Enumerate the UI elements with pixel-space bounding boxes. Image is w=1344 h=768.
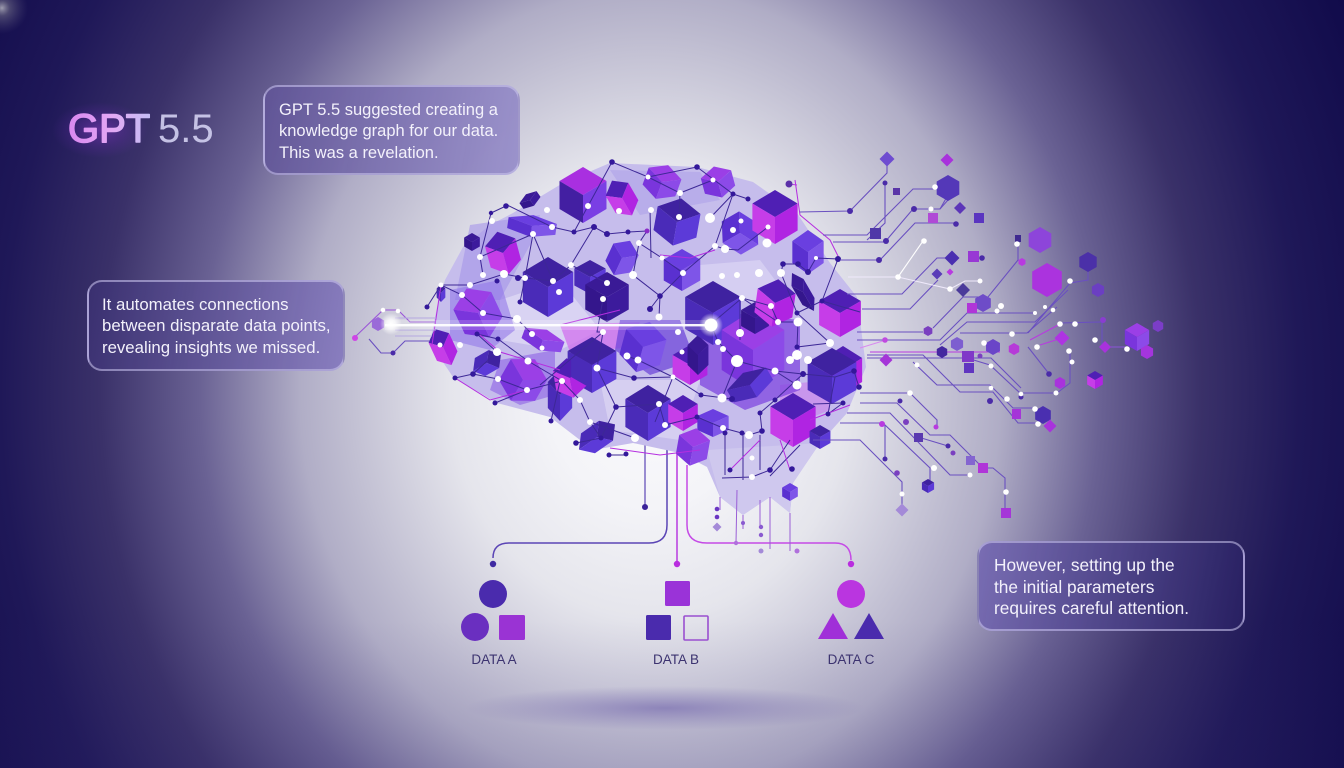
logo: GPT 5.5: GPT [68, 107, 150, 151]
floor shadow [465, 686, 865, 730]
brain nodes: dark [424, 159, 862, 473]
callout: parameters caution: However, setting up the [994, 555, 1175, 575]
callout: automates connections [87, 280, 345, 371]
circuit white dots [895, 184, 1130, 496]
callout: parameters caution: the initial parameters [994, 577, 1154, 597]
circuit square nodes [870, 188, 1021, 518]
circuit traces bright [789, 184, 1127, 352]
callout: automates connections: between disparate data points, [102, 316, 331, 335]
data C icon group [818, 580, 884, 639]
left input circuit [352, 308, 436, 356]
circuit dark dots [786, 180, 1106, 476]
circuit hexagon nodes [880, 152, 1163, 516]
data A icon group [461, 580, 525, 641]
circuit traces right [800, 160, 1127, 512]
data connector lines [490, 440, 854, 567]
brain silhouette [430, 163, 866, 515]
callout: knowledge graph [263, 85, 520, 175]
brain polyhedra [424, 159, 862, 501]
label: data B: DATA B [653, 652, 699, 667]
brain nodes: white [438, 174, 834, 480]
callout: knowledge graph: This was a revelation. [279, 144, 439, 162]
callout: knowledge graph: GPT 5.5 suggested creating a [279, 100, 498, 118]
brain lower drip nodes [712, 490, 800, 554]
callout: automates connections: It automates connections [102, 294, 289, 314]
callout: parameters caution [977, 541, 1245, 631]
glowing data beam [380, 313, 723, 337]
logo glow [52, 102, 148, 158]
logo: GPT 5.5: 5.5 [158, 107, 214, 151]
label: data C: DATA C [828, 652, 874, 667]
logo: GPT 5.5 [68, 107, 214, 151]
callout: knowledge graph: knowledge graph for our data. [279, 122, 498, 140]
corner glow [0, 0, 28, 34]
callout: automates connections: revealing insights we missed. [102, 338, 320, 357]
brain network links [427, 162, 860, 480]
label: data A: DATA A [471, 652, 517, 667]
data B icon group [646, 581, 708, 640]
callout: parameters caution: requires careful attention. [994, 598, 1189, 618]
